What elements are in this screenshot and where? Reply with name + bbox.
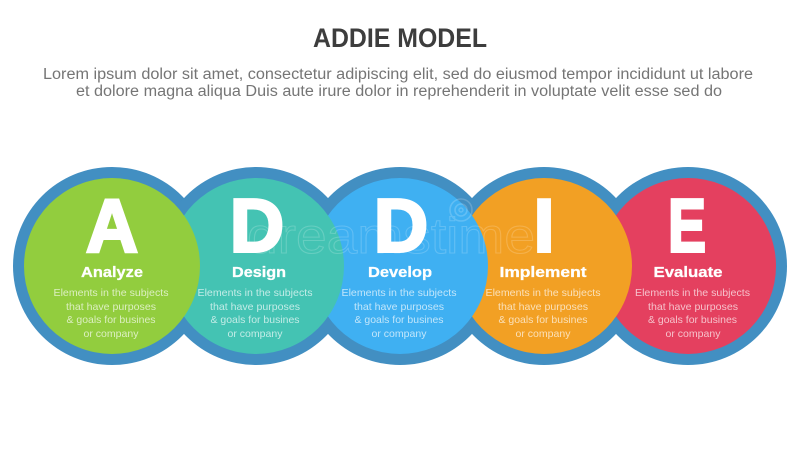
description Implement: that have purposes [498,301,588,313]
description Evaluate: that have purposes [648,301,738,313]
description Develop: Elements in the subjects [342,287,456,299]
heading Implement: Implement [500,264,587,281]
letter E: E [668,184,706,268]
description Evaluate: & goals for busines [648,314,737,326]
description Analyze: that have purposes [66,301,156,313]
title: ADDIE MODEL [313,23,487,53]
description Analyze: or company [84,328,139,340]
description Develop: or company [372,328,427,340]
subtitle text [43,66,753,100]
panel: Implement [456,178,632,354]
letter D: D [374,184,428,268]
description Evaluate: Elements in the subjects [635,287,750,299]
panel: Design [168,178,344,354]
description Design [198,287,312,340]
description Evaluate: or company [666,328,721,340]
panel: Evaluate [600,178,776,354]
letter A: A [86,184,138,268]
description Design: Elements in the subjects [198,287,312,299]
panel: Analyze [24,178,200,354]
description Develop: & goals for busines [354,314,444,326]
subtitle text: Lorem ipsum dolor sit amet, consectetur adipiscing elit, sed do eiusmod tempor incididunt ut labore [43,66,753,83]
description Design: & goals for busines [210,314,300,326]
heading Analyze: Analyze [81,264,143,281]
letter I: I [534,184,554,268]
panel: Develop [312,178,488,354]
heading Develop: Develop [368,264,432,281]
heading Evaluate: Evaluate [654,264,722,281]
description Analyze: Elements in the subjects [54,287,168,299]
watermark: dreamstime [247,208,535,264]
heading Design: Design [232,264,286,281]
description Analyze: & goals for busines [66,314,156,326]
description Implement: or company [516,328,571,340]
description Implement: Elements in the subjects [486,287,600,299]
description Design: or company [228,328,283,340]
description Design: that have purposes [210,301,300,313]
description Implement [486,287,600,340]
description Develop [342,287,456,340]
description Develop: that have purposes [354,301,444,313]
letter D: D [230,184,284,268]
description Analyze [54,287,168,340]
subtitle text: et dolore magna aliqua Duis aute irure dolor in reprehenderit in voluptate velit esse sed do [76,83,722,100]
description Evaluate [635,287,750,340]
description Implement: & goals for busines [498,314,588,326]
outer ring chain [13,167,787,365]
